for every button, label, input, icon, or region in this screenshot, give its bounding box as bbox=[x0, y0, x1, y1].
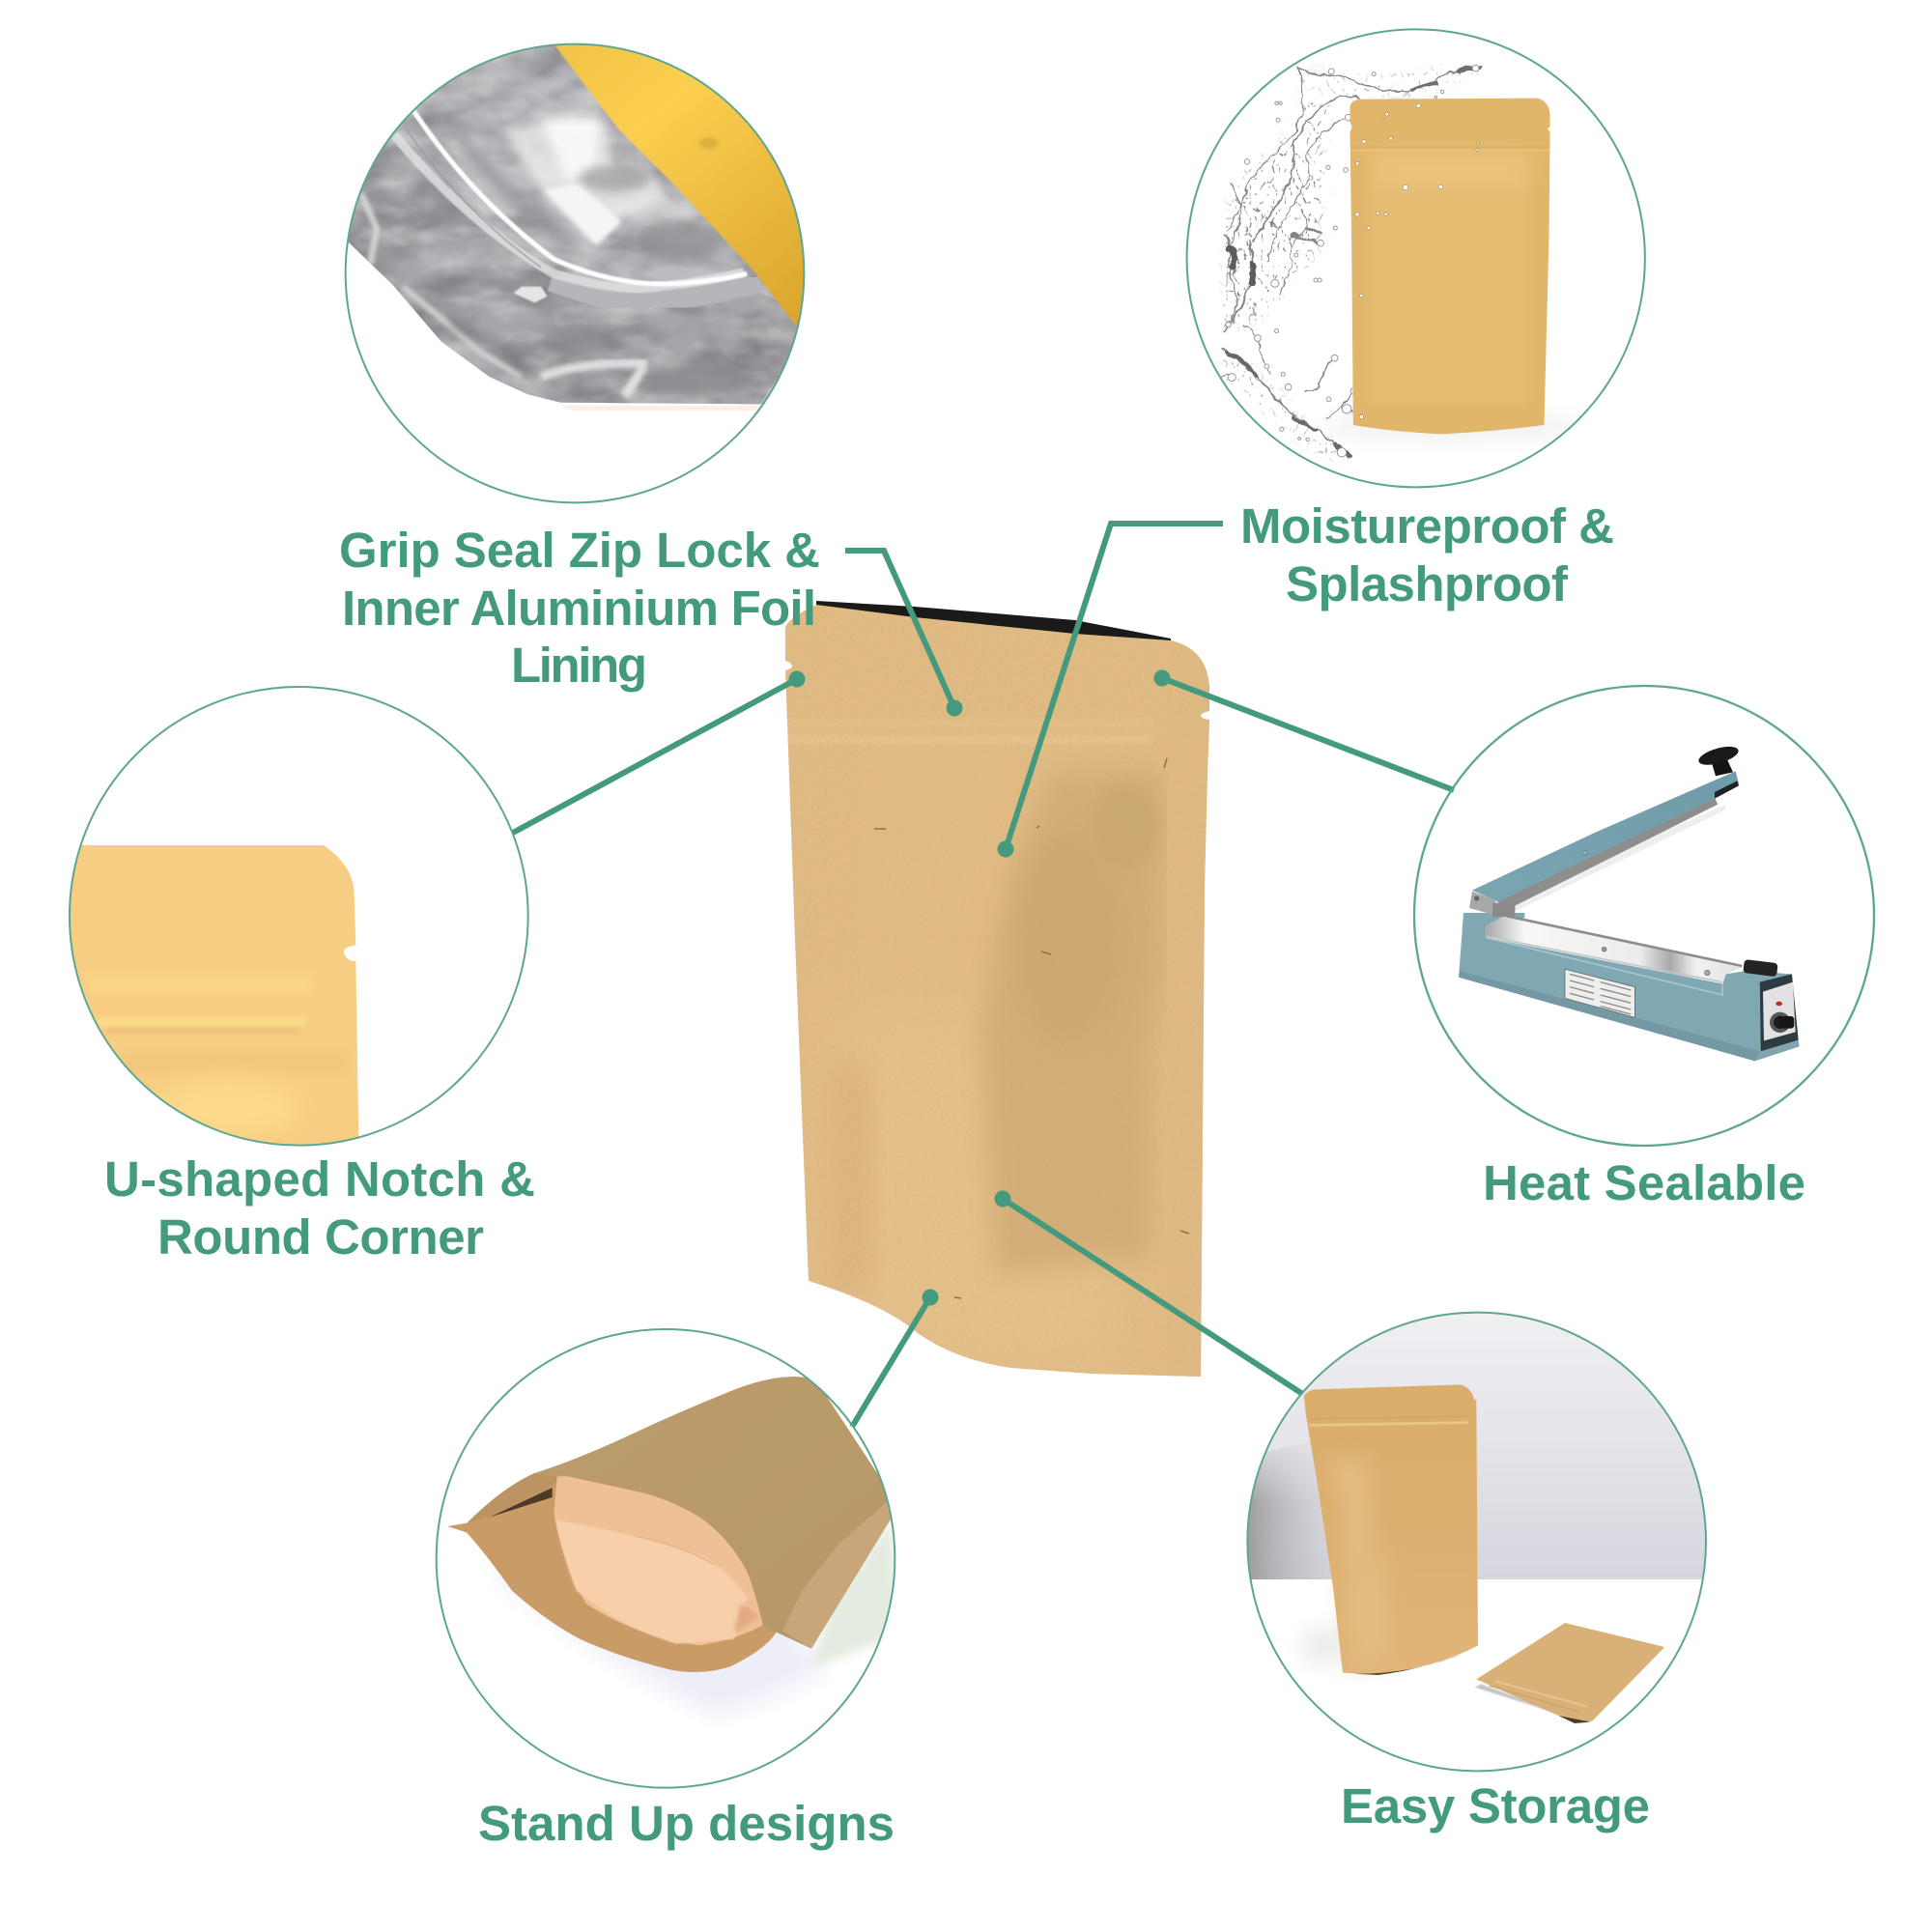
line: stand up callout bbox=[852, 1289, 939, 1427]
label: u-shaped notch: U-shaped Notch & bbox=[104, 1151, 535, 1207]
label: inner aluminium foil: Inner Aluminium Foil bbox=[342, 581, 816, 636]
label: heat sealable: Heat Sealable bbox=[1483, 1155, 1805, 1210]
circle outline bbox=[1414, 686, 1874, 1146]
main kraft pouch bbox=[773, 589, 1227, 1391]
panel: heat sealer machine bbox=[1414, 686, 1874, 1146]
circle outline bbox=[70, 687, 528, 1146]
pouch in moisture panel bbox=[1350, 99, 1550, 434]
label: round corner: Round Corner bbox=[157, 1209, 484, 1264]
circle outline bbox=[1247, 1313, 1706, 1771]
panel: moistureproof pouch with water splash bbox=[1187, 29, 1645, 487]
circle outline bbox=[437, 1329, 895, 1788]
label: easy storage: Easy Storage bbox=[1341, 1778, 1650, 1833]
circle outline bbox=[1187, 29, 1645, 487]
line: heat sealable callout bbox=[1153, 670, 1454, 790]
panel: easy storage scene bbox=[1236, 1304, 1719, 1789]
label: grip seal zip lock: Grip Seal Zip Lock & bbox=[339, 523, 820, 578]
label: splashproof: Splashproof bbox=[1286, 556, 1569, 611]
line: notch callout bbox=[513, 670, 806, 833]
circle outline bbox=[346, 44, 804, 502]
flat pouch bbox=[1475, 1623, 1664, 1724]
water splash band bbox=[1221, 65, 1479, 457]
standing pouch bbox=[1304, 1384, 1478, 1675]
line: zip lock callout bbox=[845, 551, 962, 717]
panel: notch and round corner close-up bbox=[48, 687, 528, 1161]
label: lining: Lining bbox=[511, 638, 647, 693]
callout lines and centre product bbox=[513, 524, 1454, 1427]
line: easy storage callout bbox=[995, 1190, 1304, 1395]
panel: foil lining close-up bbox=[344, 43, 806, 504]
pouch back and inner gusset bbox=[447, 1473, 780, 1672]
label: moistureproof: Moistureproof & bbox=[1240, 498, 1614, 554]
sealer base bbox=[1459, 913, 1800, 1061]
panel: stand up pouch close-up bbox=[437, 1329, 898, 1788]
pouch front flap bbox=[534, 1377, 895, 1649]
line: moistureproof callout bbox=[997, 524, 1223, 858]
label: stand up designs: Stand Up designs bbox=[478, 1796, 895, 1851]
sealer arm bbox=[1469, 743, 1741, 917]
